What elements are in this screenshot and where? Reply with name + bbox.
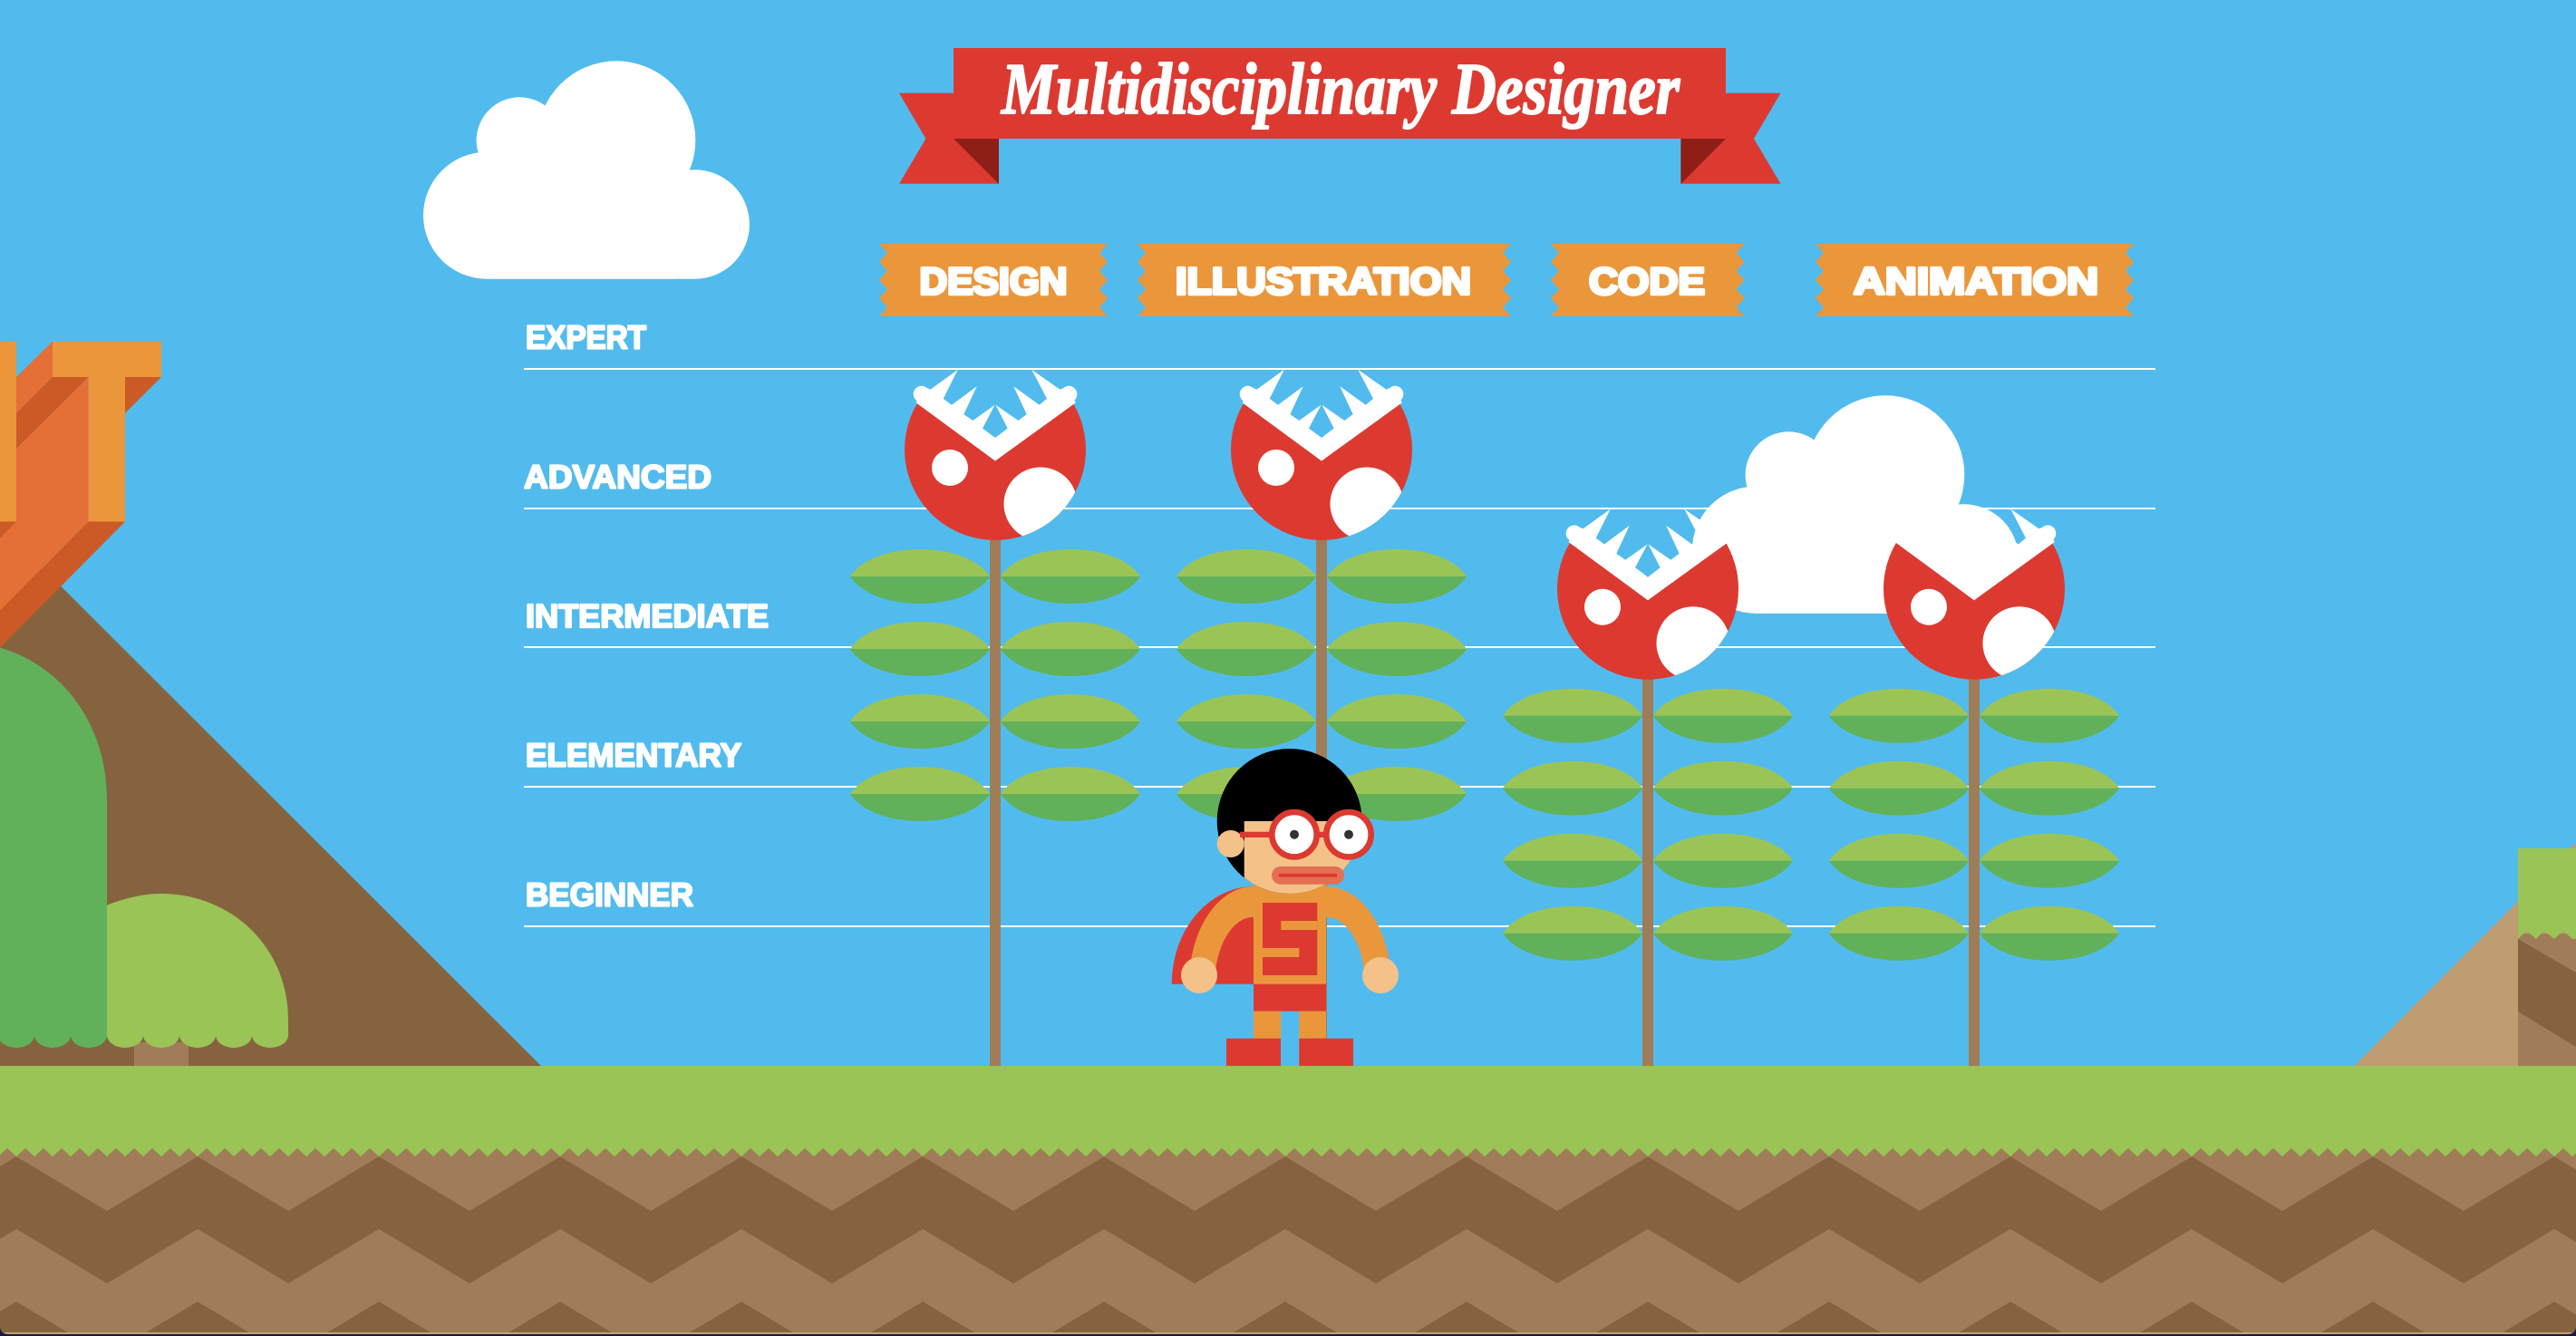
chest emblem bbox=[1263, 903, 1317, 975]
level label: elementary: ELEMENTARY bbox=[526, 736, 741, 774]
right arm bbox=[1326, 886, 1389, 968]
character: superhero designer bbox=[1172, 749, 1399, 1066]
dark green bush bbox=[0, 648, 107, 1048]
cape bbox=[1172, 886, 1254, 984]
tag: code bbox=[1551, 244, 1744, 316]
level label: expert: EXPERT bbox=[526, 319, 646, 355]
tag text: animation: ANIMATION bbox=[1854, 259, 2098, 303]
left arm bbox=[1191, 886, 1254, 968]
boots bbox=[1226, 1039, 1353, 1066]
tag: illustration bbox=[1138, 244, 1511, 316]
left hill bbox=[0, 526, 541, 1066]
level label: beginner: BEGINNER bbox=[526, 876, 693, 914]
tag text: code: CODE bbox=[1589, 259, 1705, 303]
ground: grass bbox=[0, 1066, 2576, 1157]
level label: intermediate: INTERMEDIATE bbox=[526, 597, 769, 634]
tag text: design: DESIGN bbox=[919, 259, 1068, 303]
plant: illustration skill bbox=[1177, 370, 1467, 1039]
right hill bbox=[2354, 843, 2576, 1066]
light green bush bbox=[100, 894, 288, 1048]
plant: code skill bbox=[1503, 509, 1793, 1066]
tag text: illustration: ILLUSTRATION bbox=[1176, 259, 1471, 303]
title: Multidisciplinary Designer bbox=[1000, 50, 1680, 130]
cloud: behind plants bbox=[1692, 395, 2019, 614]
face bbox=[1244, 821, 1362, 894]
cloud: upper left bbox=[423, 61, 750, 279]
shorts bbox=[1254, 984, 1326, 1012]
glasses bbox=[1240, 812, 1371, 857]
mouth bbox=[1272, 866, 1344, 885]
title ribbon bbox=[899, 48, 1780, 184]
hair bbox=[1217, 749, 1362, 894]
level label: advanced: ADVANCED bbox=[524, 459, 712, 495]
tag: design bbox=[879, 244, 1108, 316]
tag: animation bbox=[1816, 244, 2134, 316]
plant: design skill bbox=[850, 370, 1140, 1066]
right grass block bbox=[2518, 848, 2576, 1066]
ear bbox=[1217, 830, 1244, 857]
tree trunk bbox=[134, 1042, 189, 1066]
torso bbox=[1254, 885, 1326, 984]
skill level grid lines bbox=[524, 368, 2155, 927]
legs bbox=[1254, 1012, 1326, 1039]
plant: animation skill bbox=[1829, 509, 2119, 1066]
castle letters bbox=[0, 342, 161, 648]
hands bbox=[1181, 957, 1399, 993]
ground: soil bbox=[0, 1142, 2576, 1336]
